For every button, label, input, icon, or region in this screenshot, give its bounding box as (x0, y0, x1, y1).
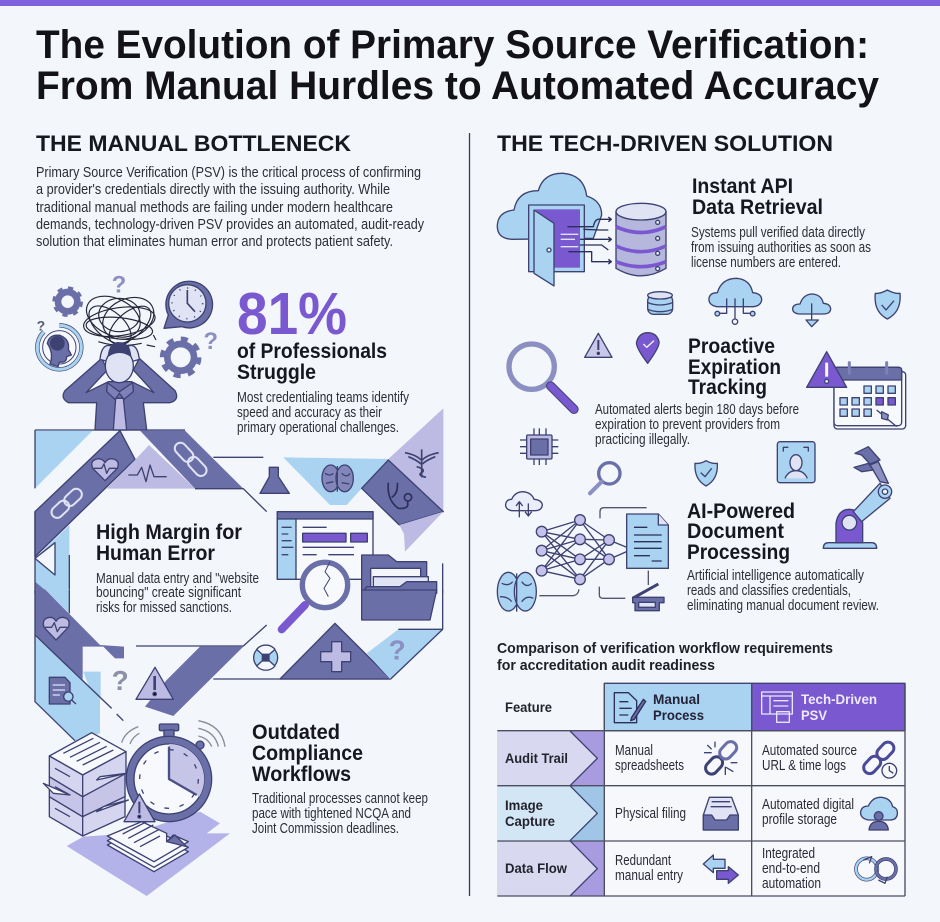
text block: outdated compliance workflows: Compliance (252, 741, 363, 765)
icon: broken chain (703, 739, 739, 777)
question marks: ? (203, 328, 218, 355)
text block: outdated compliance workflows: Outdated (252, 720, 340, 744)
table row labels (505, 750, 568, 876)
table tech cells: Automated source (762, 743, 857, 759)
question marks (37, 271, 218, 355)
icon: document search (49, 677, 76, 704)
title: From Manual Hurdles to Automated Accuracy (36, 64, 880, 108)
panel: geometric ribbon frame (35, 408, 443, 593)
table manual cells: spreadsheets (615, 758, 684, 774)
icon: caduceus (405, 449, 439, 477)
icon: database server (616, 203, 666, 276)
text block: proactive expiration tracking (595, 334, 799, 448)
icon: data arrows (567, 217, 611, 264)
text block: ai-powered document processing: Processing (687, 540, 790, 564)
table header text: Feature (505, 699, 552, 715)
icon: chain with clock (861, 740, 897, 778)
icon: large gear (162, 339, 199, 376)
icon: calendar with alert (807, 352, 906, 429)
warning triangle on stopwatch (124, 794, 155, 822)
text block: ai-powered document processing: AI-Powered (687, 499, 795, 523)
text block: outdated compliance workflows (252, 720, 428, 837)
panel: tech icons upper (497, 173, 906, 465)
icon: shield check (875, 290, 900, 319)
table row labels: Data Flow (505, 860, 567, 876)
table manual cells: manual entry (615, 868, 684, 884)
icon: ecg line (128, 465, 167, 482)
text block: outdated compliance workflows: Workflows (252, 762, 351, 786)
icon: tech window (762, 692, 792, 722)
icon: robot arm (823, 447, 892, 548)
table tech cells: profile storage (762, 812, 837, 828)
icon: cross medical (321, 642, 351, 672)
table manual cells: Manual (615, 743, 653, 759)
brackets and links (539, 508, 648, 598)
panel: lower ribbon and outdated workflow illustration (35, 589, 443, 896)
icon: document (627, 514, 668, 568)
icon: small database (648, 292, 673, 314)
shadow floor (67, 812, 230, 896)
icon: stressed man (63, 343, 177, 430)
table row labels: Capture (505, 813, 555, 829)
table tech cells: end-to-end (762, 861, 820, 877)
icon: cloud download (793, 294, 831, 327)
text block: instant api data retrieval: license numbers are entered. (691, 255, 841, 271)
icon: paper stack (43, 733, 128, 836)
icon: flask (260, 467, 289, 493)
intro text block: solution that eliminates human error and protects patient safety. (36, 233, 393, 250)
text block: high margin for human error: Human Error (96, 541, 216, 565)
text block: high margin for human error: High Margin for (96, 520, 243, 544)
question marks (112, 634, 406, 696)
icon: tangled thoughts scribble (80, 288, 161, 351)
icon: browser window (277, 512, 373, 579)
text block: proactive expiration tracking: Proactive (688, 334, 775, 358)
table heading (497, 640, 833, 674)
intro text block: Primary Source Verification (PSV) is the critical process of confirming (36, 164, 421, 181)
icon: chain on ribbon (172, 440, 209, 478)
text block: proactive expiration tracking: Automated alerts begin 180 days before (595, 402, 799, 418)
text block: proactive expiration tracking: expiration to prevent providers from (595, 417, 780, 433)
warning triangle (136, 667, 173, 699)
icon: chain lower (49, 486, 84, 520)
callout: 81% statistic: 81% (237, 281, 347, 347)
table tech cells (762, 743, 857, 892)
callout: 81% statistic (237, 281, 410, 436)
callout: 81% statistic: Struggle (237, 360, 316, 384)
icon: loose papers (107, 822, 188, 872)
heading: the tech-driven solution: THE TECH-DRIVEN SOLUTION (497, 131, 833, 156)
text block: outdated compliance workflows: Joint Commission deadlines. (252, 821, 399, 837)
icon: location pin (636, 333, 659, 363)
intro text block: demands, technology-driven PSV provides an automated, audit-ready (36, 216, 424, 233)
icon: radial pie (254, 645, 278, 670)
table header text: Manual (653, 691, 700, 707)
icon: manila folders (362, 555, 437, 593)
text block: instant api data retrieval (691, 174, 871, 271)
text block: ai-powered document processing (687, 499, 879, 614)
icon: clock speech bubble (164, 281, 213, 328)
table manual cells: Physical filing (615, 806, 686, 822)
text block: high margin for human error (96, 520, 259, 616)
table manual cells (615, 743, 686, 884)
icon: brain (322, 465, 353, 492)
icon: face scan (777, 442, 815, 483)
panel: tech icons lower (497, 442, 892, 612)
icon: swap arrows (703, 855, 738, 883)
table header text (505, 691, 877, 723)
table manual cells: Redundant (615, 853, 671, 869)
icon: small magnifier (590, 463, 620, 493)
table shapes and icons (497, 683, 905, 896)
icon: warning triangle (585, 333, 612, 357)
text block: ai-powered document processing: Document (687, 519, 784, 543)
table tech cells: automation (762, 876, 821, 892)
text block: high margin for human error: bouncing" create significant (96, 585, 241, 601)
icon: heart pulse (92, 459, 118, 481)
icon: cloud sync (506, 492, 542, 517)
text block: high margin for human error: Manual data entry and "website (96, 571, 259, 587)
intro text block: traditional manual methods are failing under modern healthcare (36, 199, 393, 216)
icon: cloud with door (497, 173, 602, 286)
title: The Evolution of Primary Source Verification: (36, 23, 869, 67)
text block: proactive expiration tracking: Tracking (688, 375, 767, 399)
icon: folder base (362, 590, 437, 620)
icon: manual form (614, 693, 646, 723)
callout: 81% statistic: Most credentialing teams identify (237, 390, 410, 406)
panel: stressed professional illustration (35, 271, 443, 608)
icon: magnifier handle (282, 605, 305, 629)
icon: circuit cloud (709, 278, 762, 324)
table tech cells: Automated digital (762, 797, 854, 813)
text block: proactive expiration tracking: Expiration (688, 355, 781, 379)
table tech cells: URL & time logs (762, 758, 846, 774)
text block: ai-powered document processing: eliminating manual document review. (687, 598, 879, 614)
icon: head in ring (37, 325, 81, 369)
text block: outdated compliance workflows: Traditional processes cannot keep (252, 791, 428, 807)
icon: microchip (520, 428, 558, 465)
icon: brain (497, 572, 536, 612)
text block: high margin for human error: risks for missed sanctions. (96, 600, 232, 616)
text block: instant api data retrieval: Data Retrieval (692, 195, 823, 219)
intro text block: a provider's credentials directly with the issuing authority. While (36, 181, 390, 198)
callout: 81% statistic: primary operational challenges. (237, 420, 399, 436)
table header text: Process (653, 707, 704, 723)
icon: infinite sync loop (856, 857, 896, 883)
icon: cloud profile (861, 797, 897, 830)
question marks: ? (37, 318, 45, 334)
text block: proactive expiration tracking: practicing illegally. (595, 432, 690, 448)
text block: outdated compliance workflows: pace with tightened NCQA and (252, 806, 411, 822)
icon: neural network (536, 515, 632, 585)
ribbon shapes (35, 589, 443, 741)
heading: the manual bottleneck: THE MANUAL BOTTLENECK (36, 131, 351, 156)
question marks: ? (112, 665, 129, 696)
sparks (704, 742, 737, 775)
icon: scanner (633, 584, 664, 611)
callout: 81% statistic: speed and accuracy as their (237, 405, 382, 421)
callout: 81% statistic: of Professionals (237, 339, 387, 363)
table header text: Tech-Driven (801, 691, 877, 707)
icon: magnifier with crack (302, 562, 348, 608)
icon: stopwatch (122, 721, 225, 822)
icon: large magnifier (509, 344, 574, 409)
icon: shield (695, 461, 717, 486)
table row labels: Image (505, 797, 543, 813)
icon: small gear (54, 288, 81, 315)
question marks: ? (112, 271, 126, 298)
icon: heart (43, 617, 69, 640)
question marks: ? (389, 634, 406, 665)
title (36, 23, 880, 108)
table tech cells: Integrated (762, 846, 815, 862)
text block: ai-powered document processing: Artificial intelligence automatically (687, 568, 865, 584)
text block: ai-powered document processing: reads and classifies credentials, (687, 583, 851, 599)
intro text block (36, 164, 424, 250)
icon: filing tray (703, 797, 738, 830)
icon: stethoscope (388, 483, 412, 508)
table row labels: Audit Trail (505, 750, 568, 766)
table heading: Comparison of verification workflow requirements (497, 640, 833, 657)
table header text: PSV (801, 707, 828, 723)
text block: instant api data retrieval: from issuing authorities as soon as (691, 240, 871, 256)
text block: instant api data retrieval: Instant API (692, 174, 793, 198)
comparison table (497, 683, 905, 896)
table heading: for accreditation audit readiness (497, 657, 715, 674)
text block: instant api data retrieval: Systems pull verified data directly (691, 225, 866, 241)
